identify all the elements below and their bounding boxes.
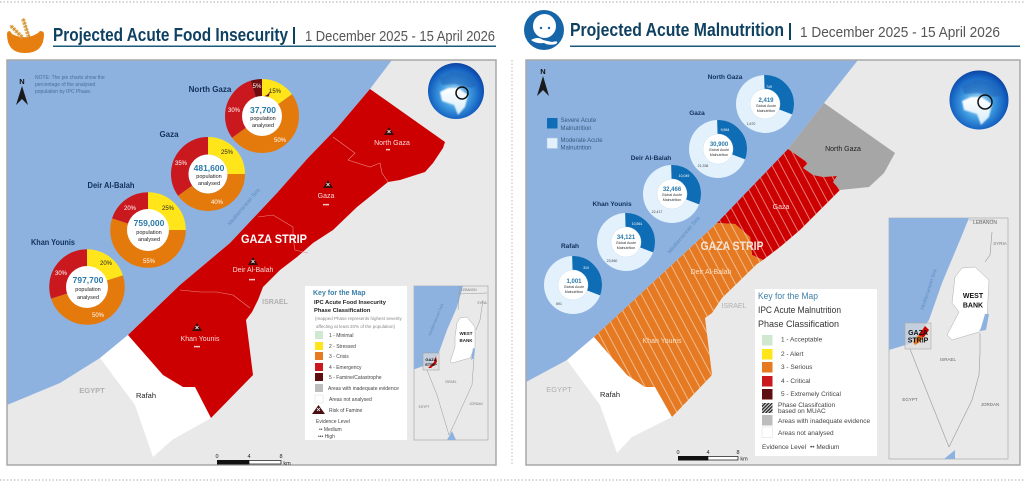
scale bar: food insecurity: 8 [279, 454, 283, 460]
legend: malnutrition: Areas not analysed [778, 430, 834, 437]
donut: Khan Younis: 20% [100, 261, 113, 267]
region: Deir Al-Balah and Khan Younis serious [594, 223, 763, 417]
legend: malnutrition: IPC Acute Malnutrition [758, 305, 841, 315]
inset map: malnutrition [889, 218, 1008, 459]
inset map: food insecurity: WEST [460, 331, 473, 336]
icon: child with spoon [524, 10, 564, 50]
donut: Khan Younis: 797,700 [73, 275, 104, 285]
donut: Rafah malnutrition: Global Acute [564, 285, 584, 289]
donut: North Gaza malnutrition: 1,670 [747, 122, 755, 126]
legend: malnutrition: Phase Classifcation [778, 402, 835, 409]
legend: malnutrition: based on MUAC [778, 408, 826, 415]
inset map: food insecurity: SYRIA [477, 301, 488, 305]
icon: globe [428, 63, 484, 119]
legend: food insecurity: 4 - Emergency [329, 365, 362, 371]
legend: malnutrition: Areas with inadequate evidence [778, 418, 871, 425]
legend: malnutrition: •• Medium [810, 444, 839, 451]
panel: projected acute food insecurity [7, 18, 496, 467]
panel: projected acute malnutrition [524, 10, 1020, 465]
scale bar: malnutrition [676, 450, 748, 462]
donut: Deir Al-Balah: 25% [162, 206, 175, 212]
donut: Deir Al-Balah [88, 181, 177, 265]
map labels: food insecurity: Khan Younis [181, 336, 220, 343]
map labels: food insecurity: Mediterranean Sea [227, 187, 262, 227]
legend: food insecurity: Risk of Famine [329, 408, 363, 414]
title: food insecurity: 1 December 2025 - 15 April 2026 [305, 28, 495, 45]
legend: food insecurity: Phase Classification [314, 308, 371, 314]
donut: Khan Younis: Khan Younis [31, 238, 75, 247]
legend: food insecurity: •• Medium [319, 427, 342, 433]
icon: globe [950, 70, 1008, 130]
donut: Rafah malnutrition: Malnutrition [565, 290, 583, 294]
map frame: malnutrition [526, 60, 1020, 465]
inset map: malnutrition: STRIP [908, 338, 929, 344]
map labels: malnutrition: Khan Younis [643, 338, 682, 345]
map labels: food insecurity: ••• [249, 278, 255, 284]
donut: Deir Al-Balah: analysed [138, 237, 160, 243]
legend: food insecurity: 3 - Crisis [329, 354, 349, 360]
title: malnutrition [570, 20, 1020, 47]
legend: food insecurity: 5 - Famine/Catastrophe [329, 375, 382, 381]
inset map: malnutrition: ISRAEL [940, 357, 956, 362]
donut: North Gaza malnutrition [708, 74, 794, 133]
donut: North Gaza: North Gaza [189, 85, 232, 94]
donut: Khan Younis malnutrition: Khan Younis [592, 201, 632, 208]
legend: food insecurity: 2 - Stressed [329, 344, 356, 350]
donut: Deir Al-Balah malnutrition: 32,466 [663, 187, 682, 193]
region: Gaza critical [717, 149, 840, 260]
scale bar: food insecurity [215, 454, 291, 467]
donut: Khan Younis malnutrition: 23,560 [607, 259, 617, 263]
donut: Rafah malnutrition: 310 [583, 266, 589, 270]
donut: North Gaza malnutrition: North Gaza [708, 74, 743, 81]
title: malnutrition: 1 December 2025 - 15 April 2026 [800, 24, 1000, 41]
icon: north arrow [537, 67, 549, 96]
legend: food insecurity: IPC Acute Food Insecurity [314, 300, 387, 306]
inset map: malnutrition: WEST [963, 293, 984, 300]
donut: North Gaza malnutrition: Malnutrition [757, 109, 775, 113]
donut: Khan Younis malnutrition [592, 201, 655, 271]
map labels: food insecurity: ISRAEL [262, 299, 289, 306]
inset map: food insecurity: GAZA [425, 357, 437, 362]
donut: Deir Al-Balah: population [136, 230, 162, 236]
donut: North Gaza: 30% [228, 108, 241, 114]
donut: Khan Younis malnutrition: Global Acute [616, 241, 636, 245]
donut: Rafah malnutrition: Rafah [561, 243, 579, 250]
legend: severe and moderate malnutrition: Malnutrition [560, 146, 592, 152]
map labels: malnutrition: ISRAEL [722, 303, 747, 310]
donut: Gaza malnutrition [689, 110, 747, 178]
donut: Khan Younis malnutrition: Malnutrition [617, 246, 635, 250]
map labels: food insecurity: GAZA STRIP [241, 232, 307, 246]
donut: Khan Younis: 50% [92, 313, 105, 319]
legend: food insecurity: Evidence Level [316, 419, 350, 425]
legend: severe and moderate malnutrition [547, 118, 603, 152]
legend: severe and moderate malnutrition: Malnutrition [560, 126, 592, 132]
donut: Deir Al-Balah: 759,000 [134, 218, 165, 228]
map labels: malnutrition [546, 146, 861, 399]
legend: severe and moderate malnutrition: Moderate Acute [560, 138, 603, 144]
donut: Khan Younis malnutrition: 34,121 [617, 235, 636, 241]
region: phase 4 emergency [128, 89, 445, 418]
donut: Rafah malnutrition: 1,001 [566, 279, 582, 285]
donut: Gaza malnutrition: Malnutrition [710, 153, 728, 157]
inset map: malnutrition: LEBANON [973, 220, 997, 226]
legend: malnutrition: Key for the Map [758, 291, 818, 302]
scale bar: food insecurity: km [283, 461, 291, 467]
donut: Gaza: population [196, 174, 222, 180]
inset map: malnutrition: GAZA [908, 330, 928, 337]
icon: north arrow: N [19, 77, 25, 86]
legend: malnutrition: 5 - Extremely Critical [781, 391, 842, 398]
legend: malnutrition: 2 - Alert [781, 351, 804, 358]
map labels: malnutrition: Rafah [600, 390, 620, 399]
map labels: malnutrition: North Gaza [825, 146, 861, 153]
map labels: malnutrition: Mediterranean Sea [667, 215, 702, 255]
legend: food insecurity: ••• High [318, 434, 335, 440]
title: malnutrition: Projected Acute Malnutrition [570, 20, 784, 40]
scale bar: food insecurity: 0 [215, 454, 219, 460]
legend: malnutrition: 4 - Critical [781, 378, 811, 385]
scale bar: food insecurity: 4 [247, 454, 251, 460]
legend: food insecurity: Areas not analysed [329, 397, 372, 403]
legend: malnutrition: Evidence Level [762, 444, 807, 451]
donut: Gaza: 40% [211, 200, 224, 206]
donut: North Gaza malnutrition: Global Acute [756, 104, 776, 108]
note: percentage of the analysed [35, 82, 96, 88]
frame border [7, 60, 496, 465]
scale bar: malnutrition: km [740, 456, 748, 462]
note: NOTE: The pie charts show the [35, 75, 105, 81]
legend: food insecurity [305, 286, 407, 440]
donut: North Gaza [189, 84, 290, 144]
scale bar: malnutrition: 4 [706, 450, 710, 456]
inset map: malnutrition: SYRIA [993, 241, 1007, 246]
icon: north arrow: N [540, 67, 546, 76]
inset map: malnutrition: Mediterranean Sea [920, 268, 939, 311]
donut: North Gaza malnutrition: 2,419 [758, 98, 774, 104]
map labels: malnutrition: EGYPT [546, 385, 572, 394]
icon: north arrow [16, 77, 28, 105]
region: North Gaza inadequate evidence [788, 103, 895, 190]
map labels: malnutrition: Deir Al-Balah [691, 269, 732, 276]
map labels: malnutrition: Gaza [773, 204, 789, 211]
donut: Khan Younis: 30% [55, 271, 68, 277]
donut: Gaza malnutrition: 21,336 [698, 164, 708, 168]
title: food insecurity [53, 25, 496, 47]
scale bar: malnutrition: 8 [736, 450, 740, 456]
map labels: food insecurity: ••• [194, 345, 200, 351]
donut: Deir Al-Balah malnutrition: Deir Al-Balah [631, 155, 671, 162]
donut: Khan Younis malnutrition: 10,561 [632, 222, 642, 226]
icon: bowl with wheat [7, 18, 44, 53]
donut: North Gaza: 5% [253, 84, 262, 90]
sea [526, 60, 858, 382]
map labels: food insecurity: ••• [323, 203, 329, 209]
donut: Deir Al-Balah malnutrition: Malnutrition [663, 198, 681, 202]
legend: malnutrition [755, 289, 877, 456]
legend: malnutrition: Phase Classification [758, 319, 839, 330]
donut: Deir Al-Balah malnutrition [631, 155, 701, 223]
legend: food insecurity: 1 - Minimal [329, 333, 353, 339]
donut: Deir Al-Balah malnutrition: Global Acute [662, 193, 682, 197]
legend: severe and moderate malnutrition: Severe Acute [560, 118, 597, 124]
legend: malnutrition: 3 - Serious [781, 364, 813, 371]
icons: risk of famine markers [192, 127, 394, 331]
inset map: food insecurity: Mediterranean Sea [427, 302, 445, 336]
inset map: food insecurity: STRIP [425, 362, 437, 367]
donut: Gaza: Gaza [159, 130, 179, 139]
map labels: food insecurity: Gaza [318, 193, 334, 200]
inset map: malnutrition: JORDAN [981, 402, 999, 407]
donut: Deir Al-Balah malnutrition: 22,417 [652, 210, 662, 214]
inset map: food insecurity [414, 286, 488, 440]
note: population by IPC Phase. [35, 89, 91, 95]
map labels: food insecurity [79, 140, 410, 400]
map labels: food insecurity: Deir Al-Balah [233, 267, 274, 274]
donut: North Gaza: analysed [252, 123, 274, 129]
map labels: food insecurity: EGYPT [79, 386, 105, 395]
donut: Gaza: 35% [175, 161, 188, 167]
donut: Deir Al-Balah malnutrition: 10,049 [679, 174, 689, 178]
legend: food insecurity: (mapped Phase represents highest severity [315, 316, 403, 321]
inset map: malnutrition: EGYPT [902, 397, 918, 402]
donut: Gaza: analysed [198, 181, 220, 187]
donut: North Gaza malnutrition: 749 [766, 85, 772, 89]
map labels: malnutrition: GAZA STRIP [700, 239, 764, 253]
donut: Rafah malnutrition: 691 [556, 302, 562, 306]
donut: North Gaza: population [250, 116, 276, 122]
donut: North Gaza: 50% [274, 138, 287, 144]
inset map: food insecurity: BANK [460, 338, 473, 343]
donut: Gaza [159, 130, 236, 206]
inset map: food insecurity: ISRAEL [445, 380, 457, 384]
legend: food insecurity: Areas with inadequate evidence [328, 386, 399, 392]
sea [7, 60, 392, 405]
frame border [526, 60, 1020, 465]
region: Rafah not analysed [100, 335, 211, 457]
region: Rafah not analysed [567, 337, 672, 453]
donut: Gaza malnutrition: 9,564 [721, 128, 729, 132]
inset map: food insecurity: JORDAN [469, 402, 483, 406]
inset map: malnutrition: BANK [963, 302, 983, 310]
donut: Gaza: 481,600 [194, 163, 225, 173]
map labels: food insecurity: North Gaza [374, 140, 410, 147]
donut: North Gaza: 37,700 [250, 105, 276, 115]
legend: malnutrition: 1 - Acceptable [781, 336, 823, 344]
donut: Deir Al-Balah: Deir Al-Balah [88, 181, 135, 190]
map frame: food insecurity [7, 60, 496, 465]
donut: Rafah malnutrition [544, 243, 602, 314]
donut: Gaza malnutrition: 30,900 [710, 142, 729, 148]
donut: Khan Younis: population [75, 287, 101, 293]
legend: food insecurity: Key for the Map [313, 290, 366, 297]
donut: Khan Younis [31, 238, 116, 319]
legend: food insecurity: affecting at least 20% of the population) [316, 324, 395, 329]
map labels: food insecurity: •• [386, 148, 390, 154]
donut: Gaza malnutrition: Gaza [689, 110, 705, 117]
donut: Gaza malnutrition: Global Acute [709, 148, 729, 152]
donut: Deir Al-Balah: 20% [124, 206, 137, 212]
donut: Deir Al-Balah: 55% [143, 259, 156, 265]
inset map: food insecurity: EGYPT [419, 405, 429, 409]
donut: Khan Younis: analysed [77, 295, 99, 301]
donut: North Gaza: 15% [269, 89, 282, 95]
inset map: food insecurity: LEBANON [461, 288, 477, 292]
map labels: food insecurity: Rafah [136, 391, 156, 400]
donut: Gaza: 25% [221, 150, 234, 156]
scale bar: malnutrition: 0 [676, 450, 680, 456]
title: food insecurity: Projected Acute Food Insecurity [53, 25, 288, 45]
